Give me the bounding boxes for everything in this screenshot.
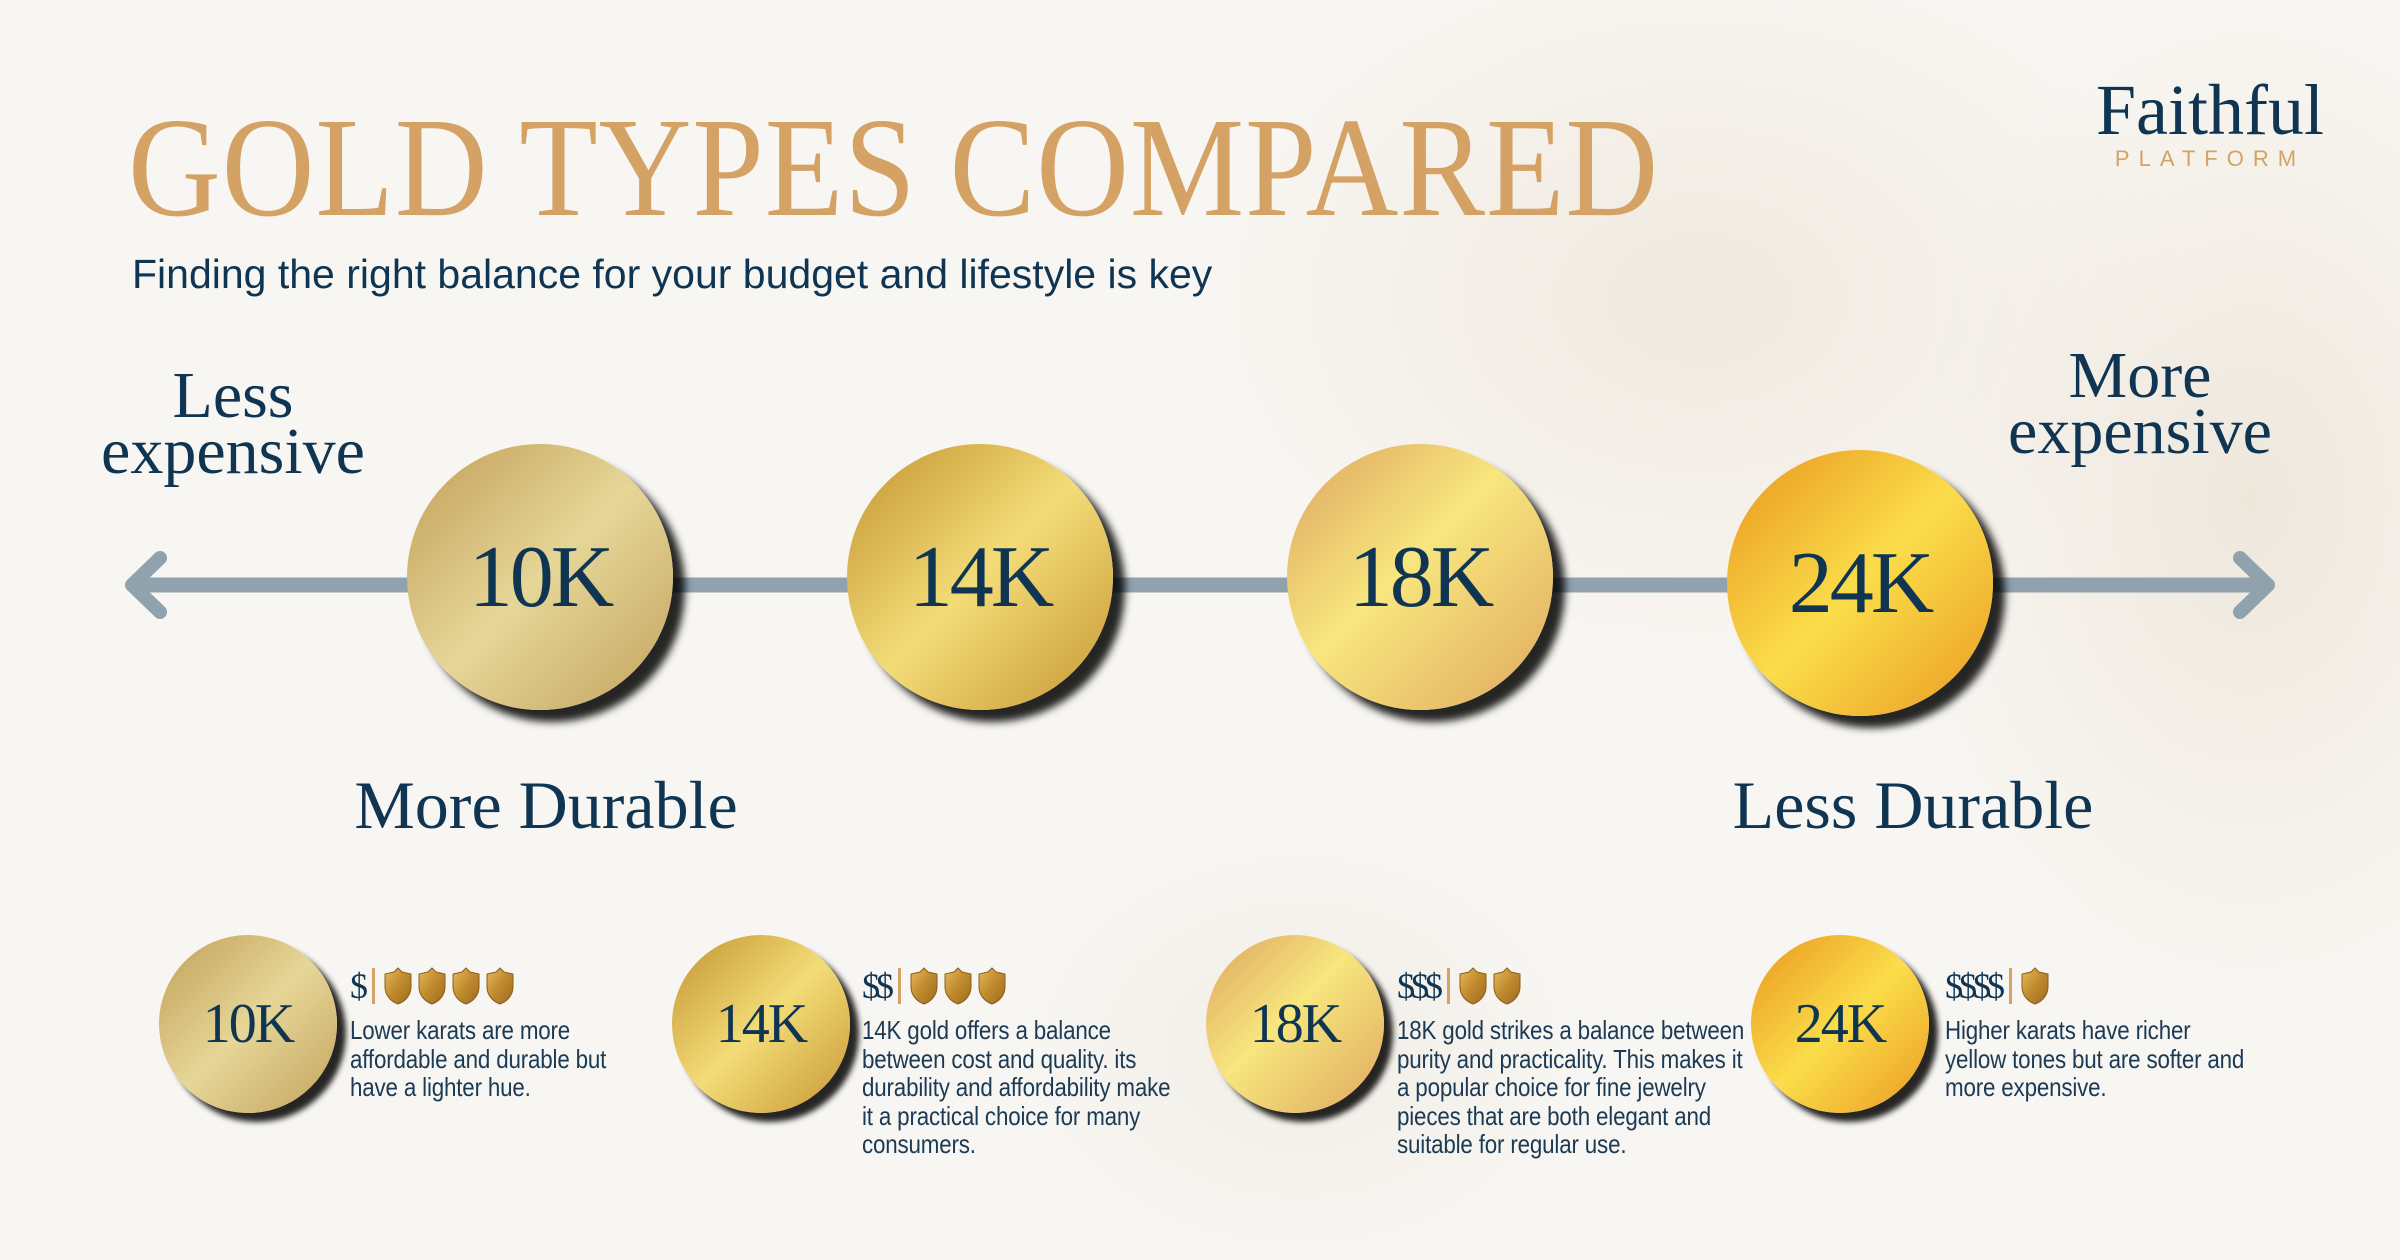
label: more expensive: expensive <box>2008 395 2272 468</box>
info: 18K <box>1397 966 1744 1159</box>
coin: 14K: 14K <box>909 528 1051 626</box>
small coin: 14K: 14K <box>716 993 806 1055</box>
logo: PLATFORM <box>2115 146 2305 171</box>
label: more expensive <box>2008 339 2272 468</box>
info: 24K <box>1945 966 2244 1102</box>
small coin: 14K <box>672 935 850 1113</box>
rating: 10K: $ <box>350 966 364 1006</box>
arrow: price axis <box>125 551 2275 619</box>
text: 10K: Lower karats are more affordable and durable but have a lighter hue. <box>350 1015 606 1102</box>
coin: 10K <box>407 444 673 710</box>
text: 24K: Higher karats have richer yellow tones but are softer and more expensive. <box>1945 1015 2244 1102</box>
coin: 24K <box>1727 450 1993 716</box>
rating: 18K <box>1397 966 1520 1006</box>
small coin: 24K: 24K <box>1795 993 1885 1055</box>
label: less expensive <box>101 359 365 488</box>
rating: 24K <box>1945 966 2048 1006</box>
rating: 14K <box>862 966 1006 1006</box>
rating: 18K: $$$ <box>1397 966 1439 1006</box>
rating: 14K: $$ <box>862 966 890 1006</box>
rating: 24K: $$$$ <box>1945 966 2001 1006</box>
label: less durable: Less Durable <box>1733 767 2093 843</box>
label: less expensive: expensive <box>101 415 365 488</box>
small coin: 10K: 10K <box>203 993 293 1055</box>
small coin: 10K <box>159 935 337 1113</box>
small coin: 24K <box>1751 935 1929 1113</box>
label: more durable: More Durable <box>354 767 738 843</box>
coin: 10K: 10K <box>469 528 611 626</box>
coin: 18K: 18K <box>1349 528 1491 626</box>
rating: 10K <box>350 966 514 1006</box>
title: GOLD TYPES COMPARED <box>128 88 1659 246</box>
label: less expensive: Less <box>172 359 293 432</box>
label: more expensive: More <box>2069 339 2211 412</box>
subtitle: Finding the right balance for your budget and lifestyle is key <box>132 251 1212 297</box>
text: 18K: 18K gold strikes a balance between purity and practicality. This makes it a popular choice for fine jewelry pieces that are both elegant and suitable for regular use. <box>1397 1015 1744 1159</box>
text: 14K: 14K gold offers a balance between cost and quality. its durability and affordability make it a practical choice for many consumers. <box>862 1015 1170 1159</box>
small coin: 18K <box>1206 935 1384 1113</box>
logo: Faithful <box>2096 70 2324 150</box>
info: 14K <box>862 966 1170 1159</box>
info: 10K <box>350 966 606 1102</box>
small coin: 18K: 18K <box>1250 993 1340 1055</box>
coin: 14K <box>847 444 1113 710</box>
coin: 18K <box>1287 444 1553 710</box>
coin: 24K: 24K <box>1789 534 1931 632</box>
